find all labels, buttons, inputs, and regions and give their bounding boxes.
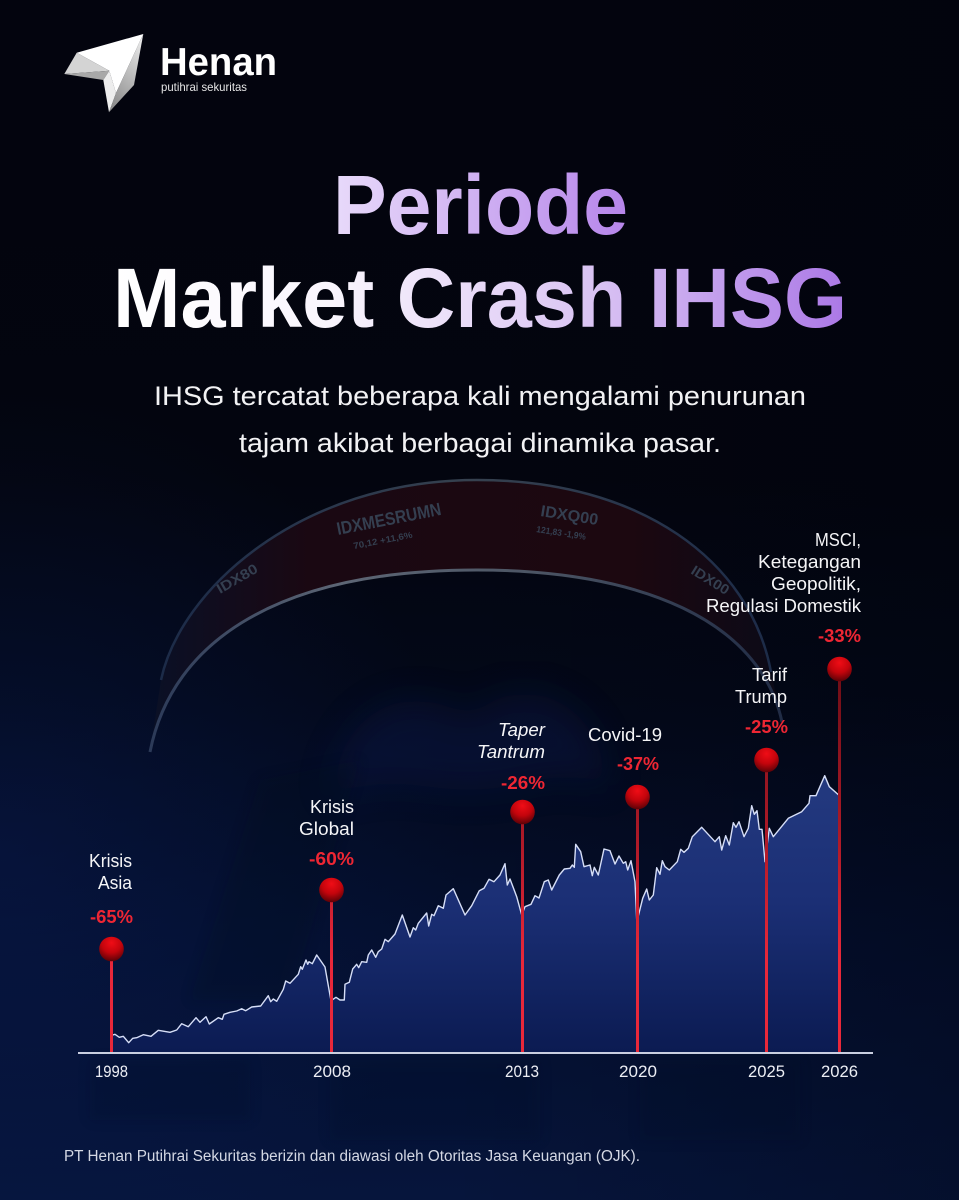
illustration: stock exchange ticker ring: IDX80 — [214, 560, 261, 597]
marker: 2008 Krisis Global: 2008 — [313, 1063, 351, 1081]
icon: paper plane — [64, 34, 143, 112]
marker: 2013 Taper Tantrum: 2013 — [505, 1063, 539, 1081]
marker: 1998 Krisis Asia: 1998 — [95, 1063, 128, 1081]
marker: 2025 Tarif Trump: -25% — [745, 717, 788, 737]
subtitle: IHSG tercatat beberapa kali mengalami penurunan — [154, 381, 806, 411]
marker: 2013 Taper Tantrum — [477, 719, 546, 1081]
illustration: stock exchange ticker ring: 70,12 +11,6% — [352, 530, 413, 551]
marker: 2020 Covid-19: 2020 — [619, 1063, 657, 1081]
marker: 2026 MSCI, Ketegangan Geopolitik, Regulasi Domestik: Geopolitik, — [771, 573, 861, 594]
illustration: stock exchange ticker ring: IDXMESRUMN — [335, 499, 443, 539]
title: Market Crash IHSG — [113, 251, 847, 345]
marker: 2020 Covid-19: -37% — [617, 754, 659, 774]
marker: 2025 Tarif Trump — [735, 664, 788, 1081]
illustration: stock exchange ticker ring: IDXQ00 — [539, 503, 599, 529]
marker: 2013 Taper Tantrum: -26% — [501, 773, 545, 793]
marker: 2026 MSCI, Ketegangan Geopolitik, Regulasi Domestik: MSCI, — [815, 529, 861, 550]
area chart: IHSG — [113, 776, 839, 1052]
subtitle: tajam akibat berbagai dinamika pasar. — [239, 428, 721, 458]
marker: 2025 Tarif Trump: Trump — [735, 686, 787, 707]
brand name: Henan — [160, 41, 277, 84]
marker: 2026 MSCI, Ketegangan Geopolitik, Regulasi Domestik: Regulasi Domestik — [706, 595, 862, 616]
marker: 2013 Taper Tantrum: Tantrum — [477, 741, 545, 762]
logo — [64, 34, 277, 112]
marker: 1998 Krisis Asia: Krisis — [89, 850, 132, 871]
marker: 2026 MSCI, Ketegangan Geopolitik, Regulasi Domestik: -33% — [818, 626, 861, 646]
marker: 1998 Krisis Asia: -65% — [90, 907, 133, 927]
title — [113, 158, 847, 345]
illustration: stock exchange ticker ring: IDX00 — [688, 562, 733, 598]
marker: 2008 Krisis Global — [299, 796, 354, 1081]
marker: 2013 Taper Tantrum: Taper — [498, 719, 546, 740]
marker: 2008 Krisis Global: Krisis — [310, 796, 354, 817]
marker: 2020 Covid-19: Covid-19 — [588, 724, 662, 745]
marker: 1998 Krisis Asia: Asia — [98, 872, 133, 893]
marker: 2025 Tarif Trump: 2025 — [748, 1063, 785, 1081]
marker: 2008 Krisis Global: Global — [299, 818, 354, 839]
illustration: stock exchange ticker ring — [150, 480, 782, 752]
marker: 2025 Tarif Trump: Tarif — [752, 664, 788, 685]
marker: 2026 MSCI, Ketegangan Geopolitik, Regulasi Domestik — [706, 529, 862, 1081]
marker: 2008 Krisis Global: -60% — [309, 849, 354, 869]
title: Periode — [333, 158, 628, 252]
illustration: stock exchange ticker ring: 121,83 -1,9% — [536, 524, 587, 542]
marker: 1998 Krisis Asia — [89, 850, 133, 1081]
marker: 2020 Covid-19 — [588, 724, 662, 1081]
chart axis — [78, 1052, 873, 1054]
marker: 2026 MSCI, Ketegangan Geopolitik, Regulasi Domestik: 2026 — [821, 1063, 858, 1081]
marker: 2026 MSCI, Ketegangan Geopolitik, Regulasi Domestik: Ketegangan — [758, 551, 861, 572]
subtitle — [154, 381, 806, 458]
footer disclaimer: PT Henan Putihrai Sekuritas berizin dan diawasi oleh Otoritas Jasa Keuangan (OJK). — [64, 1148, 640, 1165]
brand tagline: putihrai sekuritas — [161, 80, 247, 94]
